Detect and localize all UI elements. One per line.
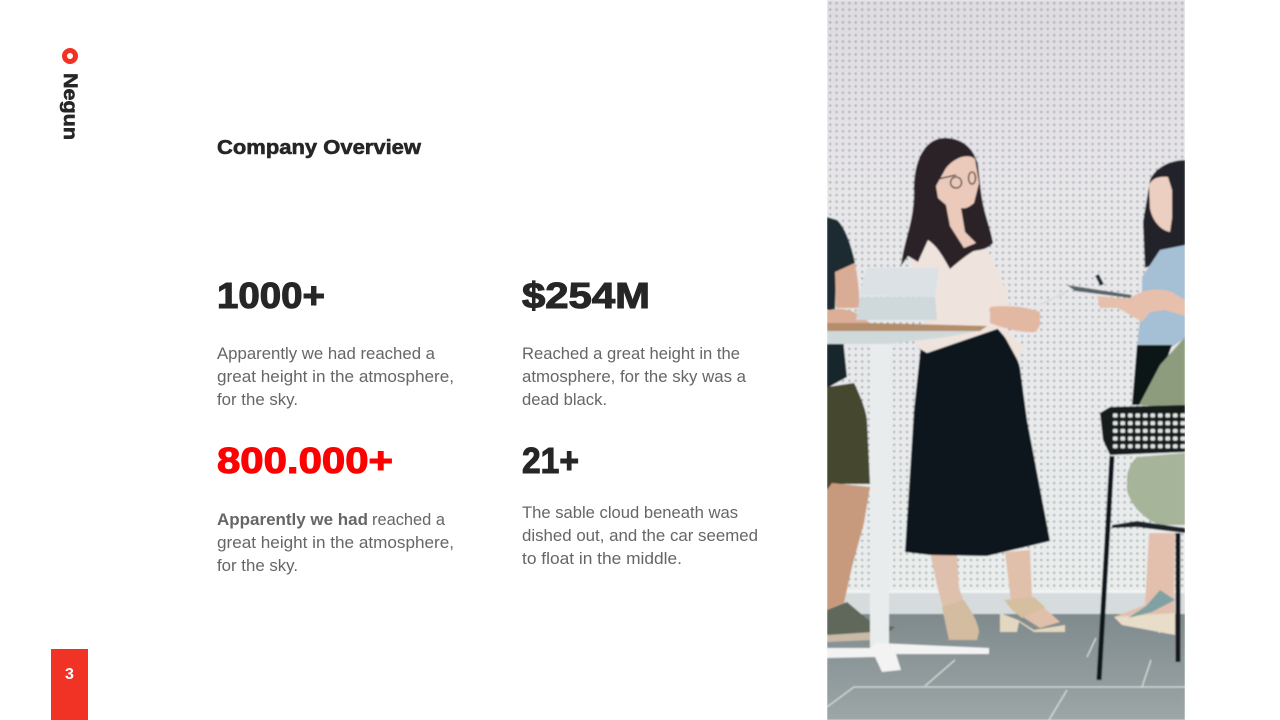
stat description (217, 510, 454, 575)
stat: 800.000+ (217, 440, 454, 575)
woman: hand (990, 306, 1040, 332)
title: Company Overview (217, 136, 421, 159)
stat description: dished out, and the car seemed (522, 526, 758, 545)
logo: Negun brand mark (59, 48, 80, 140)
stat description: Reached a great height in the (522, 344, 740, 363)
photo: team meeting around a standing table (827, 0, 1185, 720)
stat description: to float in the middle. (522, 549, 682, 568)
woman on right: top, trousers and arms (1040, 245, 1185, 405)
seated person and legs (1114, 337, 1185, 635)
stat description: The sable cloud beneath was (522, 503, 738, 522)
stat: 1000+ (217, 275, 454, 409)
woman on right: hair and face (1143, 160, 1185, 268)
page number tab: 3 (65, 666, 74, 683)
stat number: $254M (522, 275, 650, 316)
wall with perforated dots (827, 0, 1185, 592)
stat: $254M (522, 275, 747, 409)
woman: legs and sandals (930, 550, 1065, 640)
stat number, red highlight: 800.000+ (217, 440, 393, 481)
page number tab (51, 649, 88, 720)
man on left (827, 217, 895, 642)
stat number: 1000+ (217, 275, 325, 316)
woman: glasses (938, 172, 976, 188)
stat description: for the sky. (217, 556, 298, 575)
floor and skirting (827, 590, 1185, 720)
woman: face and neck (936, 156, 979, 248)
logo wordmark: Negun (59, 73, 80, 140)
stat description (522, 344, 747, 409)
stat description: great height in the atmosphere, (217, 367, 454, 386)
woman: black skirt (905, 328, 1050, 556)
stat description (217, 344, 454, 409)
stat description: dead black. (522, 390, 607, 409)
standing table (827, 323, 989, 672)
black chair (1099, 405, 1185, 680)
stat description: for the sky. (217, 390, 298, 409)
woman: hair (901, 138, 993, 269)
stat description: Apparently we had (217, 510, 368, 529)
stat description (522, 503, 758, 568)
stat: 21+ (522, 440, 758, 568)
laptop on table (856, 268, 939, 320)
stat description: atmosphere, for the sky was a (522, 367, 747, 386)
stat description: reached a (372, 510, 446, 529)
stat description: Apparently we had reached a (217, 344, 436, 363)
icon: red ring (62, 48, 78, 64)
stat number: 21+ (522, 440, 579, 481)
stat description: great height in the atmosphere, (217, 533, 454, 552)
woman: blouse (912, 240, 1024, 362)
